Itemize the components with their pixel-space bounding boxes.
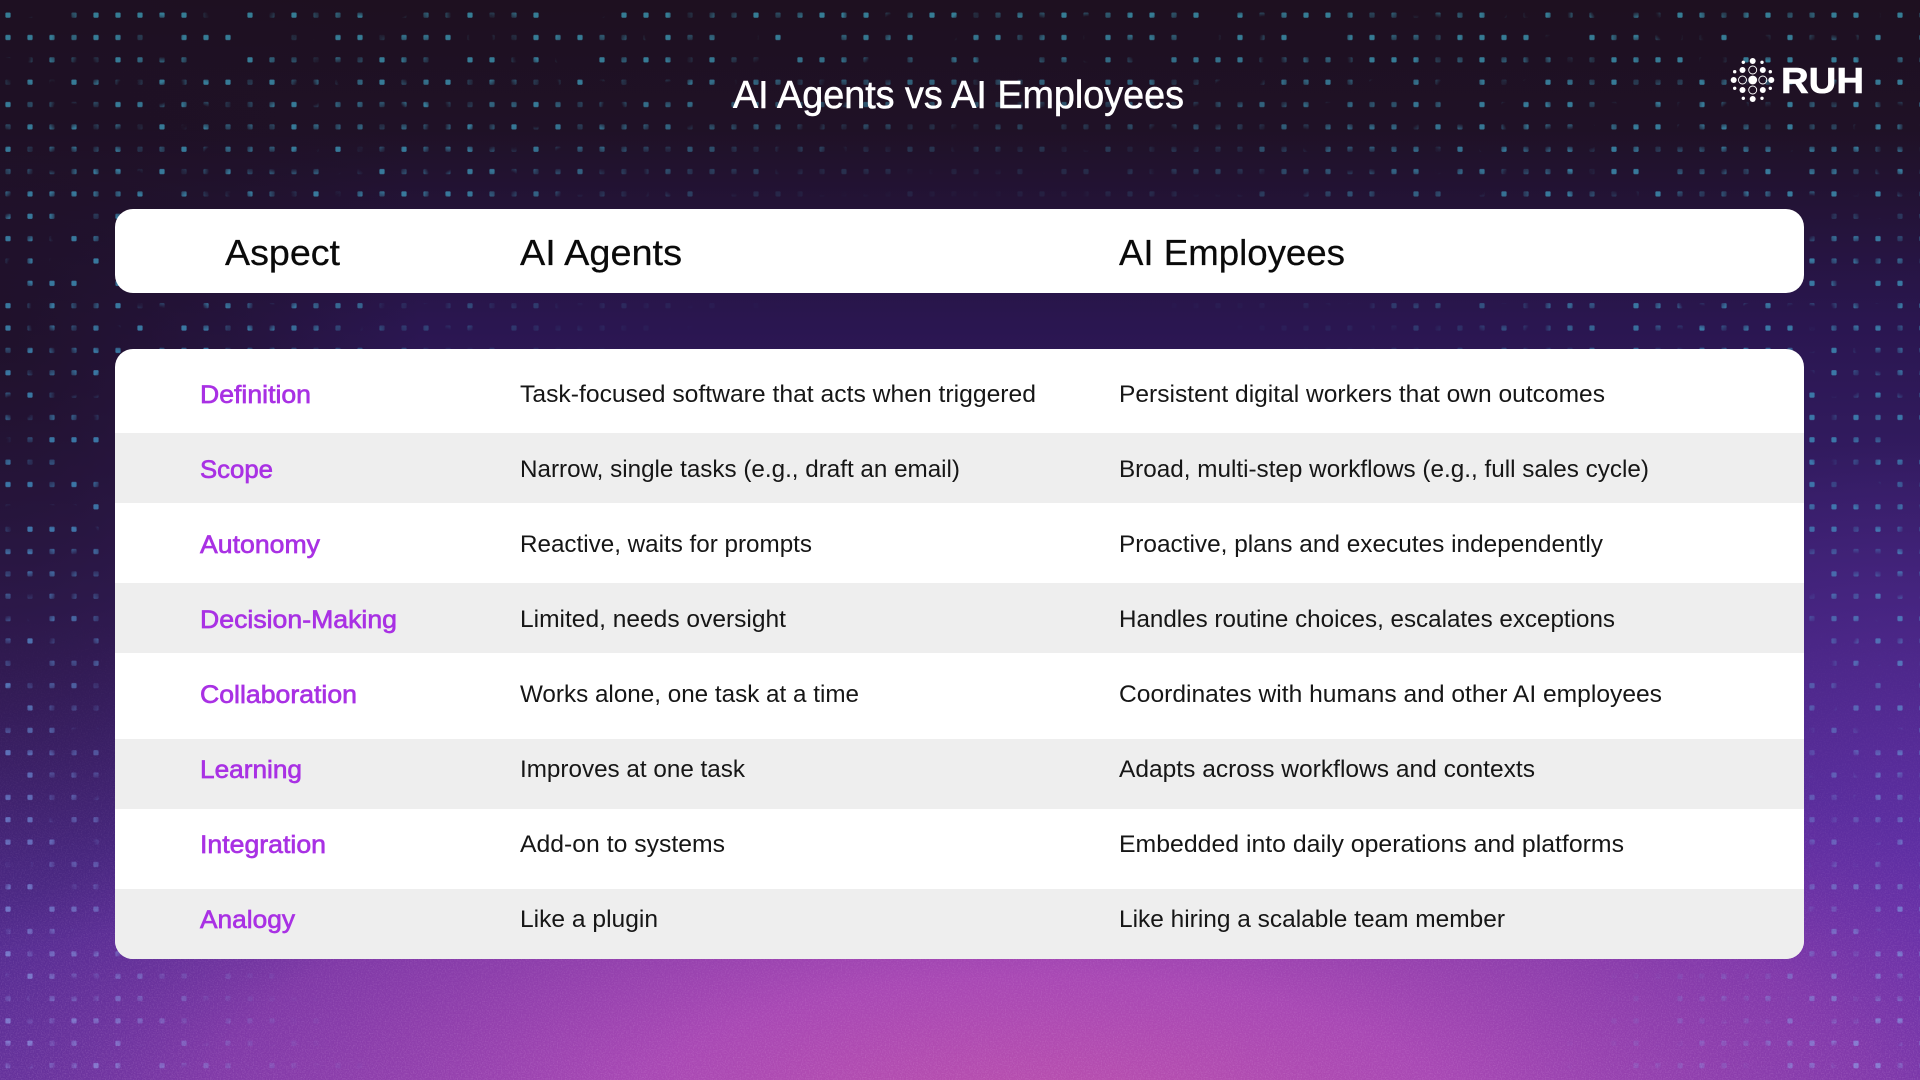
row: Autonomy: Proactive, plans and executes independently	[1119, 531, 1604, 558]
row: Learning: Adapts across workflows and contexts	[1119, 756, 1535, 783]
row: Integration: Embedded into daily operations and platforms	[1119, 831, 1624, 858]
row: Analogy: Like a plugin	[520, 906, 658, 933]
row: Collaboration	[200, 681, 1662, 709]
row: Decision-Making	[200, 606, 1615, 634]
row: Analogy	[200, 906, 1505, 934]
row: Scope: Scope	[200, 456, 273, 484]
row: Learning: Improves at one task	[520, 756, 746, 783]
row: Scope	[200, 456, 1649, 484]
row: Autonomy: Autonomy	[200, 531, 321, 559]
row: Decision-Making: Decision-Making	[200, 606, 397, 634]
title: AI Agents vs AI Employees	[733, 74, 1184, 117]
row: Integration: Integration	[200, 831, 326, 859]
row: Analogy: Like hiring a scalable team member	[1119, 906, 1505, 933]
row: Definition: Task-focused software that acts when triggered	[520, 381, 1036, 408]
row: Definition: Persistent digital workers that own outcomes	[1119, 381, 1605, 408]
header: AI Employees: AI Employees	[1119, 232, 1345, 273]
header: AI Agents: AI Agents	[520, 232, 682, 273]
panel: table header	[115, 209, 1804, 293]
icon: dotted circle mark	[1731, 58, 1774, 102]
logo: RUH	[1731, 58, 1864, 102]
logo wordmark: RUH	[1781, 60, 1864, 101]
row: Learning: Learning	[200, 756, 302, 784]
row: Integration: Add-on to systems	[520, 831, 725, 858]
row: Integration	[200, 831, 1624, 859]
row: Collaboration: Works alone, one task at a time	[520, 681, 859, 708]
panel: comparison table body	[115, 349, 1804, 959]
row: Decision-Making: Limited, needs oversight	[520, 606, 786, 633]
header: Aspect: Aspect	[225, 232, 340, 273]
row: Collaboration: Coordinates with humans and other AI employees	[1119, 681, 1662, 708]
row: Scope: Narrow, single tasks (e.g., draft an email)	[520, 456, 960, 483]
row: Decision-Making: Handles routine choices, escalates exceptions	[1119, 606, 1615, 633]
row: Definition: Definition	[200, 381, 311, 409]
row: Autonomy	[200, 531, 1604, 559]
row: Collaboration: Collaboration	[200, 681, 357, 709]
row: Scope: Broad, multi-step workflows (e.g., full sales cycle)	[1119, 456, 1649, 483]
row: Learning	[200, 756, 1535, 784]
row: Definition	[200, 381, 1605, 409]
row: Autonomy: Reactive, waits for prompts	[520, 531, 812, 558]
row: Analogy: Analogy	[200, 906, 296, 934]
